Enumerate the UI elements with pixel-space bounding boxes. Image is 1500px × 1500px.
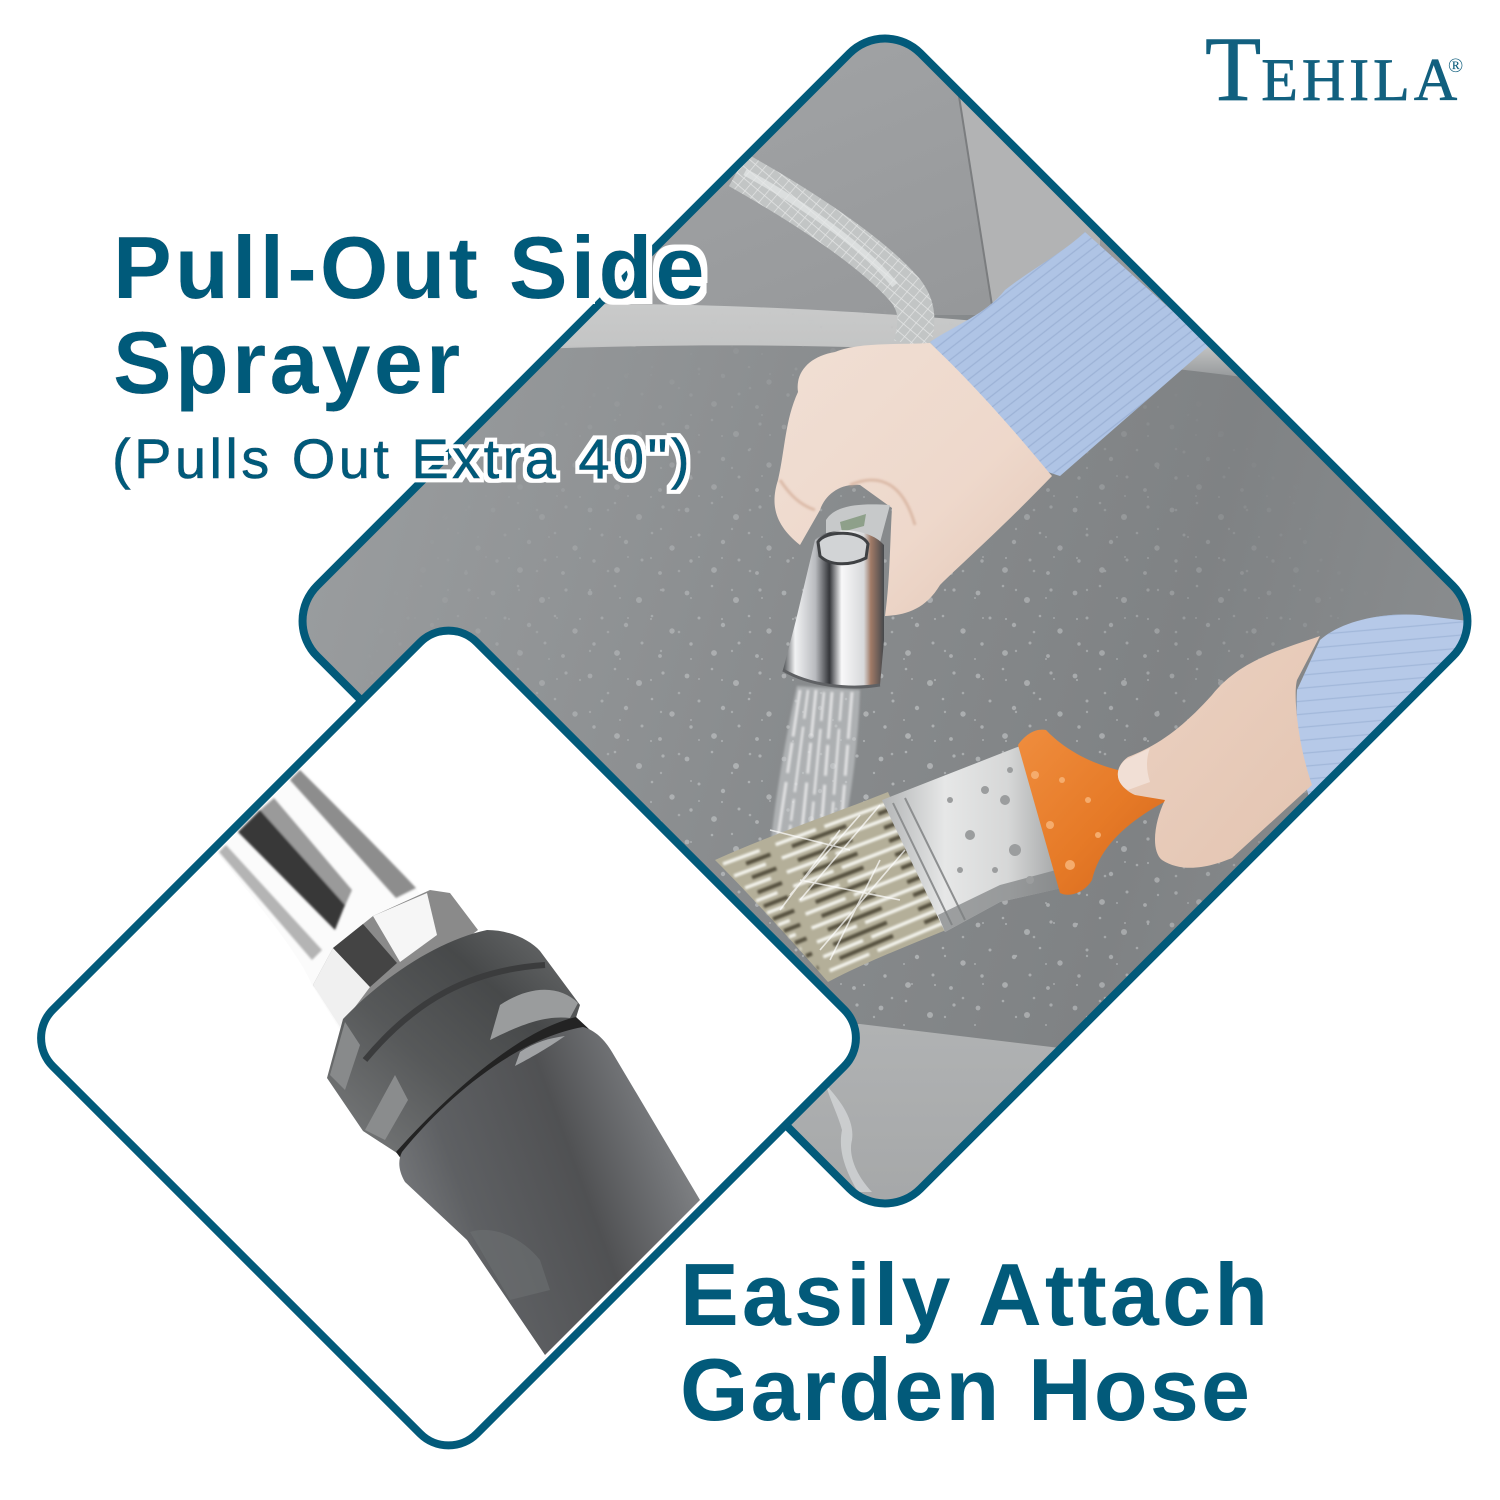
droplets on handle — [1031, 771, 1101, 870]
water splash — [826, 1085, 872, 1192]
ferrule lower shadow — [938, 870, 1062, 932]
panel: side sprayer photo — [282, 18, 1500, 1230]
threaded collar — [313, 890, 478, 1030]
bristles — [715, 792, 946, 982]
subheading: (Pulls Out Extra 40") — [112, 427, 693, 490]
heading line 2: Garden Hose — [680, 1340, 1250, 1439]
registered mark: ® — [1448, 55, 1463, 77]
sleeve: lower arm — [1296, 614, 1464, 795]
panel fill — [25, 614, 872, 1462]
heading: easily attach garden hose — [680, 1245, 1268, 1439]
heading line 2: Sprayer — [113, 313, 464, 412]
sink ledge — [560, 304, 1238, 376]
heading line 1: Easily Attach — [680, 1245, 1268, 1344]
logo wordmark: TEHILA — [1205, 18, 1461, 120]
body highlight — [515, 1036, 565, 1066]
photo: sink and sprayer scene — [290, 30, 1500, 1230]
panel outline — [282, 18, 1488, 1224]
logo: Tehila — [1205, 18, 1463, 120]
water droplets — [476, 368, 1319, 1026]
sink lower lip — [792, 1024, 1056, 1200]
chrome tube — [218, 769, 417, 961]
sleeve: upper arm — [930, 232, 1210, 476]
sprayer head — [783, 504, 890, 687]
hose — [738, 170, 916, 345]
droplets on ferrule — [947, 767, 1034, 884]
sink back wall — [605, 42, 1170, 315]
grey hex nut — [327, 930, 580, 1155]
handle — [1018, 730, 1168, 895]
lower hand — [1118, 636, 1320, 868]
rubber ring — [396, 1017, 590, 1168]
paint brush — [715, 730, 1168, 982]
heading line 1: Pull-Out Side — [113, 218, 708, 317]
body seam — [470, 1230, 550, 1300]
grey plastic body — [399, 1027, 700, 1355]
photo: garden hose connector — [217, 770, 700, 1355]
upper hand — [774, 343, 1052, 616]
panel outline — [25, 614, 872, 1462]
panel: hose connector photo — [25, 614, 872, 1462]
ferrule — [882, 746, 1062, 932]
sink basin — [306, 315, 1464, 1048]
heading: pull-out side sprayer — [112, 218, 708, 490]
water spray — [770, 686, 861, 836]
